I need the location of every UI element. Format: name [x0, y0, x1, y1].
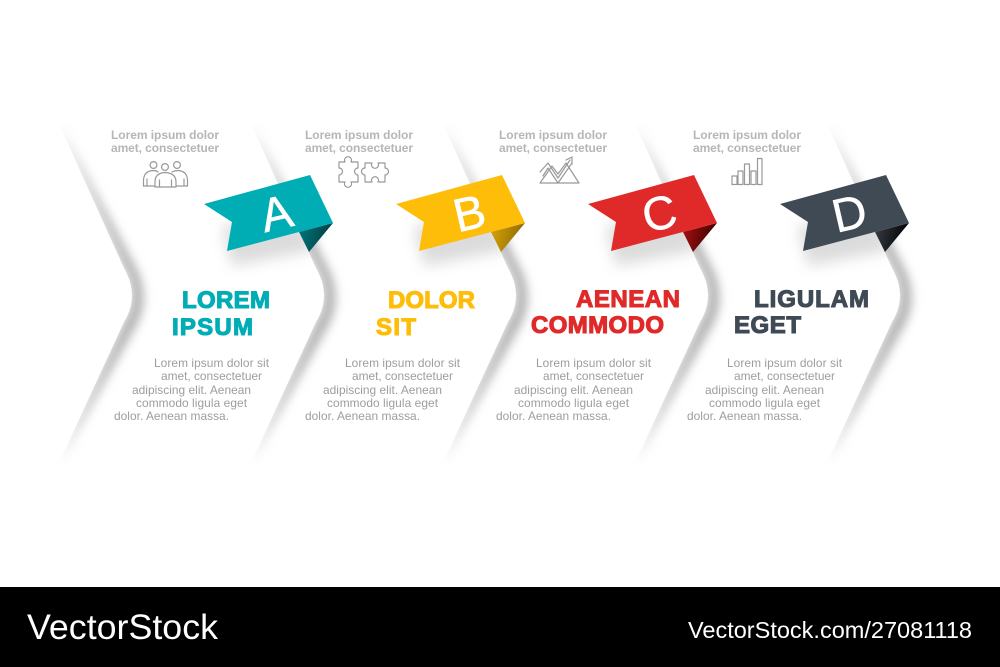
- body text C: dolor. Aenean massa.: [496, 409, 611, 423]
- body text D: adipiscing elit. Aenean: [705, 383, 824, 397]
- body text D: commodo ligula eget: [709, 396, 821, 410]
- top caption C: [499, 128, 607, 155]
- top caption A: Lorem ipsum dolor: [111, 128, 219, 142]
- step B: [305, 128, 475, 423]
- step A: [111, 128, 270, 423]
- ribbon B: B: [448, 184, 491, 242]
- icon: puzzle: [339, 157, 389, 187]
- body text C: amet, consectetuer: [543, 369, 644, 383]
- icon: people: [144, 162, 188, 187]
- footer bar: [0, 587, 1000, 667]
- ribbon C: [588, 175, 717, 266]
- chevron shadow 4: [642, 142, 726, 448]
- heading C: COMMODO: [531, 312, 664, 339]
- heading D: [734, 286, 869, 339]
- body text B: amet, consectetuer: [352, 369, 453, 383]
- footer url: VectorStock.com/27081118: [688, 617, 972, 643]
- footer logo: VectorStock: [27, 608, 219, 647]
- step C: [496, 128, 680, 423]
- heading C: AENEAN: [576, 286, 680, 313]
- chevron shadow 2: [258, 142, 342, 448]
- body text B: dolor. Aenean massa.: [305, 409, 420, 423]
- heading D: EGET: [734, 312, 801, 339]
- body text B: commodo ligula eget: [327, 396, 439, 410]
- ribbon D: D: [827, 183, 872, 243]
- chevron panels: [59, 124, 912, 463]
- top caption D: amet, consectetuer: [693, 141, 801, 155]
- body text C: [496, 356, 652, 423]
- icon: mountain chart: [540, 157, 579, 183]
- body text A: adipiscing elit. Aenean: [132, 383, 251, 397]
- body text D: amet, consectetuer: [734, 369, 835, 383]
- chevron shadow 5: [834, 142, 918, 448]
- body text C: commodo ligula eget: [518, 396, 630, 410]
- top caption A: amet, consectetuer: [111, 141, 219, 155]
- top caption D: [693, 128, 801, 155]
- body text B: Lorem ipsum dolor sit: [345, 356, 461, 370]
- step D: [687, 128, 869, 423]
- body text C: Lorem ipsum dolor sit: [536, 356, 652, 370]
- heading C: [531, 286, 680, 339]
- body text A: dolor. Aenean massa.: [114, 409, 229, 423]
- heading A: LOREM: [182, 287, 270, 314]
- top caption A: [111, 128, 219, 155]
- body text D: [687, 356, 843, 423]
- ribbon D: [780, 175, 909, 266]
- body text A: amet, consectetuer: [161, 369, 262, 383]
- top caption C: amet, consectetuer: [499, 141, 607, 155]
- heading A: [172, 287, 270, 341]
- ribbon C: C: [637, 183, 682, 243]
- chevron shadow 1: [66, 142, 150, 448]
- body text A: [114, 356, 270, 423]
- body text A: Lorem ipsum dolor sit: [154, 356, 270, 370]
- chevron shadow 3: [450, 142, 534, 448]
- top caption B: Lorem ipsum dolor: [305, 128, 413, 142]
- heading B: [376, 287, 475, 341]
- top caption D: Lorem ipsum dolor: [693, 128, 801, 142]
- body text D: dolor. Aenean massa.: [687, 409, 802, 423]
- heading A: IPSUM: [172, 314, 253, 341]
- body text B: adipiscing elit. Aenean: [323, 383, 442, 397]
- body text D: Lorem ipsum dolor sit: [727, 356, 843, 370]
- heading B: DOLOR: [388, 287, 475, 314]
- body text C: adipiscing elit. Aenean: [514, 383, 633, 397]
- heading B: SIT: [376, 314, 416, 341]
- top caption B: [305, 128, 413, 155]
- ribbon B: [396, 175, 525, 266]
- top caption B: amet, consectetuer: [305, 141, 413, 155]
- ribbon A: A: [255, 183, 298, 242]
- top caption C: Lorem ipsum dolor: [499, 128, 607, 142]
- body text A: commodo ligula eget: [136, 396, 248, 410]
- ribbon A: [204, 175, 333, 266]
- heading D: LIGULAM: [754, 286, 869, 313]
- body text B: [305, 356, 461, 423]
- icon: bar chart: [732, 158, 762, 184]
